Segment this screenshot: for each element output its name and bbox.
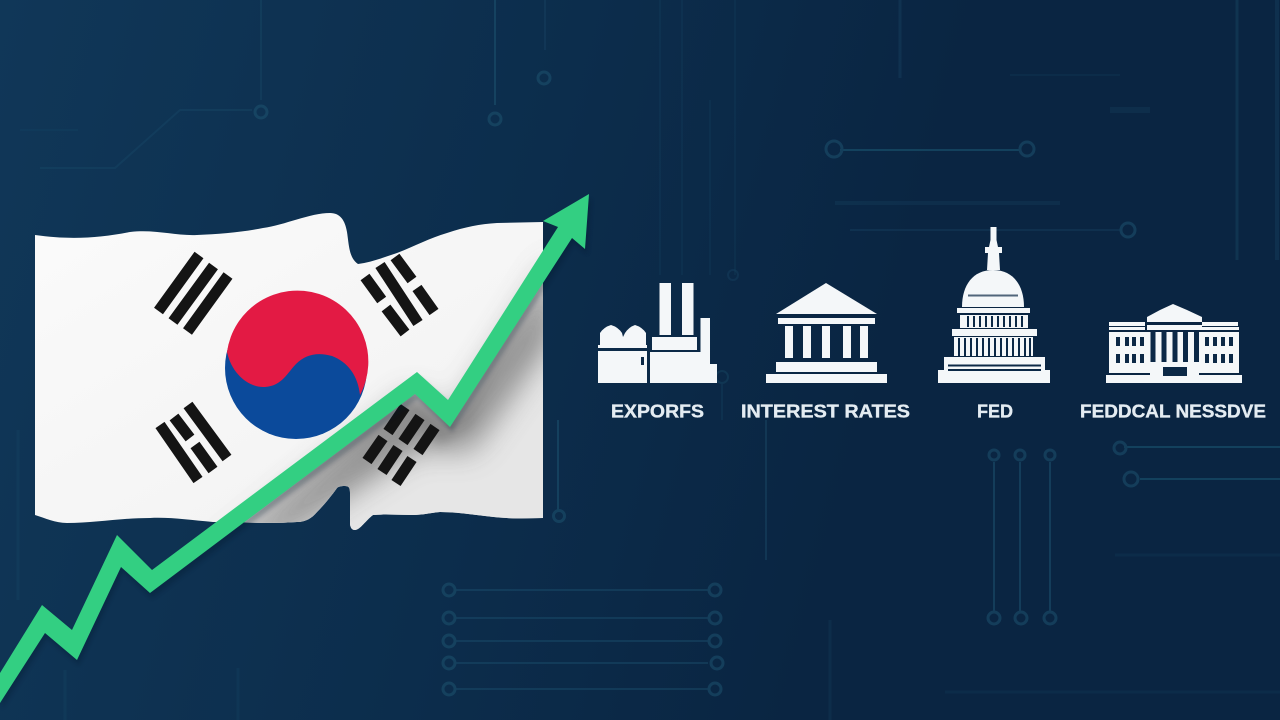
rising green arrow xyxy=(0,194,591,708)
icon: factory (exports) xyxy=(598,283,717,383)
taegeuk circle xyxy=(225,291,368,439)
trigram top right xyxy=(365,257,434,333)
label: fed: FED xyxy=(977,402,1013,422)
label: interest rates: INTEREST RATES xyxy=(741,402,910,422)
flag shadow under arrow xyxy=(244,268,543,530)
trigram bottom left xyxy=(160,405,227,480)
arrow shadow xyxy=(2,199,591,708)
trigram bottom right xyxy=(367,407,435,483)
flag of South Korea xyxy=(35,213,543,530)
label: exports: EXPORFS xyxy=(611,402,704,422)
arrow body xyxy=(0,194,589,703)
flag cloth xyxy=(35,213,543,530)
trigram top left xyxy=(158,255,228,332)
icon: Federal Reserve building xyxy=(1106,304,1242,383)
icon: capitol dome (Fed) xyxy=(938,227,1050,383)
icon: bank building (interest rates) xyxy=(766,283,887,383)
dark flag corner behind arrowhead xyxy=(543,222,558,249)
label: federal reserve: FEDDCAL NESSDVE xyxy=(1080,402,1266,422)
